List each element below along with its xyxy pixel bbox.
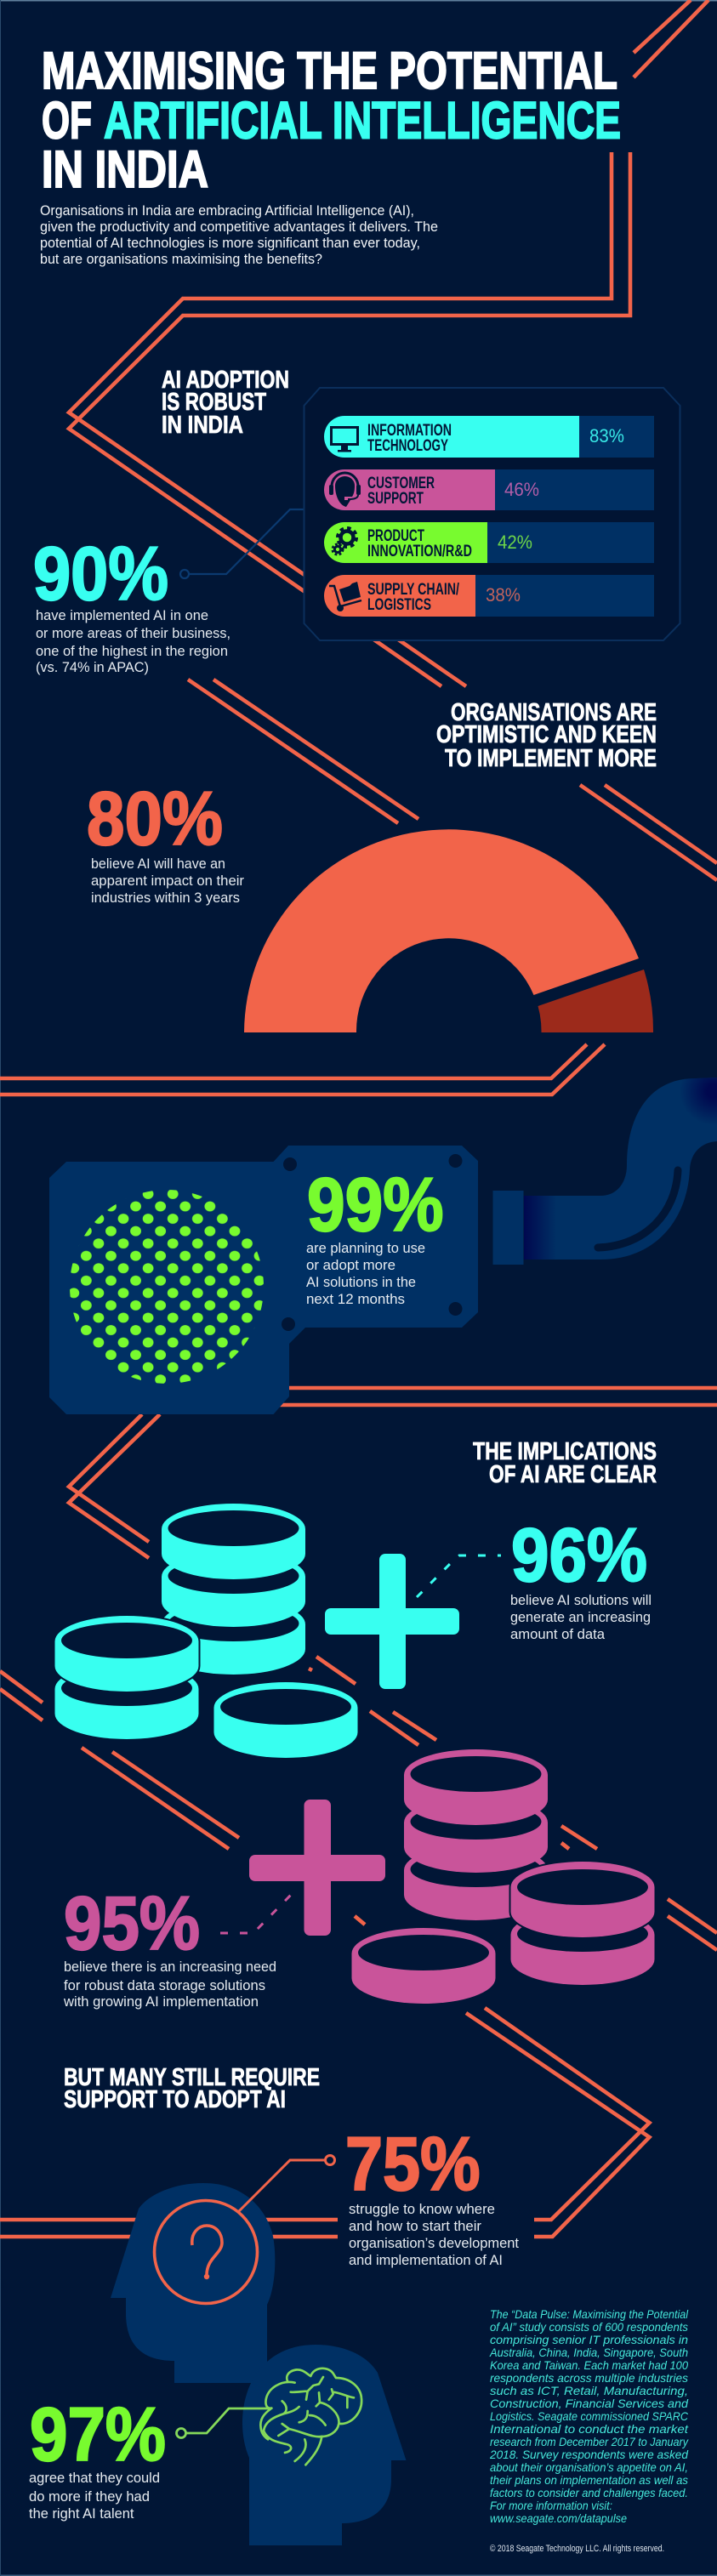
intro paragraph: but are organisations maximising the benefits? xyxy=(40,252,322,267)
bar: supply chain: SUPPLY CHAIN/ xyxy=(367,581,460,599)
stat: 80%: apparent impact on their xyxy=(91,873,244,889)
dotted connector: 96% xyxy=(417,1555,501,1597)
footnote: study information: Logistics. Seagate commissioned SPARC xyxy=(490,2409,689,2423)
stat: 75%: 75% xyxy=(345,2121,480,2206)
bar: supply chain xyxy=(324,575,654,617)
intro paragraph: Organisations in India are embracing Artificial Intelligence (AI), xyxy=(40,203,414,219)
dotted connector: 95% xyxy=(220,1892,293,1933)
stat: 80%: industries within 3 years xyxy=(91,890,240,906)
footnote: study information: research from December 2017 to January xyxy=(490,2435,689,2448)
bar: product innovation xyxy=(324,522,654,563)
title: IN INDIA xyxy=(42,140,208,198)
intro paragraph: given the productivity and competitive advantages it delivers. The xyxy=(40,219,438,235)
stat: 90% xyxy=(33,531,230,675)
stat: 75%: organisation’s development xyxy=(349,2236,519,2251)
connector: 75% xyxy=(239,2155,335,2211)
footnote: study information: International to conduct the market xyxy=(490,2422,689,2436)
bar: supply chain: 38% xyxy=(486,584,521,606)
chart: half donut 80% xyxy=(244,829,653,1032)
stat: 96%: generate an increasing xyxy=(510,1610,651,1625)
icon: gears xyxy=(333,528,356,554)
heading: implications xyxy=(473,1438,657,1488)
bar: information technology: TECHNOLOGY xyxy=(367,437,448,455)
icon: headset xyxy=(329,473,361,507)
icon: head with brain xyxy=(242,2345,407,2545)
title: OF xyxy=(42,92,92,150)
bar: customer support: 46% xyxy=(504,479,539,500)
icon: cyan data disks xyxy=(54,1504,357,1758)
stat: 97%: do more if they had xyxy=(29,2489,150,2505)
heading: AI adoption: AI ADOPTION xyxy=(162,367,289,394)
heading: organisations are optimistic: ORGANISATIONS ARE xyxy=(451,699,657,726)
heading: implications: THE IMPLICATIONS xyxy=(473,1438,657,1465)
connector: 90% to panel xyxy=(180,509,304,578)
heading: organisations are optimistic: TO IMPLEMENT MORE xyxy=(445,745,657,772)
stat: 75%: and how to start their xyxy=(349,2219,482,2234)
panel: adoption by function xyxy=(304,388,680,640)
intro paragraph xyxy=(40,203,438,267)
stat: 96%: amount of data xyxy=(510,1627,606,1642)
heading: support required xyxy=(64,2064,320,2113)
footnote: study information: their plans on implementation as well as xyxy=(490,2473,688,2487)
footnote: study information: The “Data Pulse: Maximising the Potential xyxy=(490,2307,689,2321)
heading: implications: OF AI ARE CLEAR xyxy=(489,1461,657,1488)
stat: 97%: 97% xyxy=(30,2391,166,2476)
stat: 95%: with growing AI implementation xyxy=(63,1994,259,2010)
footnote: study information: For more information visit: xyxy=(490,2499,612,2512)
stat: 90%: or more areas of their business, xyxy=(36,626,230,641)
stat: 95% xyxy=(63,1880,276,2010)
footnote: study information: such as ICT, Retail, Manufacturing, xyxy=(490,2384,688,2397)
bar: customer support xyxy=(324,469,654,510)
stat: 75%: and implementation of AI xyxy=(349,2253,503,2268)
icon: pink data disks xyxy=(352,1749,655,2004)
footnote: study information: factors to consider and challenges faced. xyxy=(490,2486,688,2499)
stat: 99%: are planning to use xyxy=(306,1241,425,1256)
stat: 90%: have implemented AI in one xyxy=(36,608,208,623)
footnote: study information: about their organisation’s appetite on AI, xyxy=(490,2460,688,2474)
bar: information technology: INFORMATION xyxy=(367,422,452,440)
bar: information technology: 83% xyxy=(589,425,624,446)
heading: AI adoption: IS ROBUST xyxy=(162,389,266,416)
stat: 96%: believe AI solutions will xyxy=(510,1593,652,1608)
icon: hand truck xyxy=(329,582,361,611)
dotted speaker grille xyxy=(70,1190,264,1384)
title xyxy=(42,42,621,198)
stat: 99%: 99% xyxy=(307,1162,444,1247)
footnote: study information: respondents across multiple industries xyxy=(490,2371,688,2385)
heading: AI adoption: IN INDIA xyxy=(162,412,243,439)
stat: 90%: one of the highest in the region xyxy=(36,644,228,659)
footnote: study information: comprising senior IT professionals in xyxy=(490,2333,688,2346)
stat: 75%: struggle to know where xyxy=(349,2202,495,2217)
heading: organisations are optimistic xyxy=(436,699,657,772)
stat: 96%: 96% xyxy=(511,1512,647,1597)
stat: 99%: AI solutions in the xyxy=(306,1275,416,1290)
brain xyxy=(260,2368,361,2465)
bar: customer support: CUSTOMER xyxy=(367,475,435,492)
icon: head with question mark xyxy=(111,2183,275,2383)
stat: 99% xyxy=(306,1162,444,1307)
footnote: study information: of AI” study consists of 600 respondents xyxy=(490,2320,688,2334)
stat: 99%: next 12 months xyxy=(306,1292,405,1307)
bar: product innovation: INNOVATION/R&D xyxy=(367,543,472,560)
footnote: study information: Korea and Taiwan. Each market had 100 xyxy=(490,2358,688,2372)
connector: 97% xyxy=(177,2408,270,2437)
panel: 99% device xyxy=(49,1146,478,1414)
stat: 80%: 80% xyxy=(87,776,223,861)
heading: support required: BUT MANY STILL REQUIRE xyxy=(64,2064,320,2091)
bar: customer support: SUPPORT xyxy=(367,490,424,508)
intro paragraph: potential of AI technologies is more significant than ever today, xyxy=(40,236,420,251)
bar: supply chain: LOGISTICS xyxy=(367,596,431,614)
copyright: © 2018 Seagate Technology LLC. All rights reserved. xyxy=(490,2544,664,2554)
pipe xyxy=(493,1067,717,1265)
stat: 95%: 95% xyxy=(64,1880,200,1965)
heading: organisations are optimistic: OPTIMISTIC AND KEEN xyxy=(436,721,657,748)
bar: product innovation: 42% xyxy=(498,532,532,553)
footnote: study information: www.seagate.com/datapulse xyxy=(490,2511,627,2525)
icon: pink plus xyxy=(249,1800,385,1936)
footnote: study information xyxy=(489,2307,689,2525)
stat: 80%: believe AI will have an xyxy=(91,856,225,872)
footnote: study information: Australia, China, India, Singapore, South xyxy=(489,2346,688,2359)
heading: support required: SUPPORT TO ADOPT AI xyxy=(64,2086,286,2113)
stat: 75% xyxy=(345,2121,519,2268)
footnote: study information: 2018. Survey respondents were asked xyxy=(489,2448,689,2461)
icon: monitor xyxy=(332,427,357,452)
stat: 90%: 90% xyxy=(33,531,168,616)
stat: 90%: (vs. 74% in APAC) xyxy=(36,660,149,675)
stat: 96% xyxy=(510,1512,652,1642)
footnote: study information: Construction, Financial Services and xyxy=(490,2397,689,2410)
bar: information technology xyxy=(324,416,654,458)
stat: 97% xyxy=(29,2391,166,2522)
bar: product innovation: PRODUCT xyxy=(367,527,424,545)
stat: 80% xyxy=(87,776,244,906)
stat: 97%: agree that they could xyxy=(29,2471,160,2486)
heading: AI adoption xyxy=(162,367,289,439)
stat: 99%: or adopt more xyxy=(306,1258,395,1273)
stat: 95%: for robust data storage solutions xyxy=(64,1978,265,1993)
stat: 95%: believe there is an increasing need xyxy=(64,1959,276,1975)
icon: cyan plus xyxy=(325,1554,459,1689)
stat: 97%: the right AI talent xyxy=(29,2506,134,2522)
